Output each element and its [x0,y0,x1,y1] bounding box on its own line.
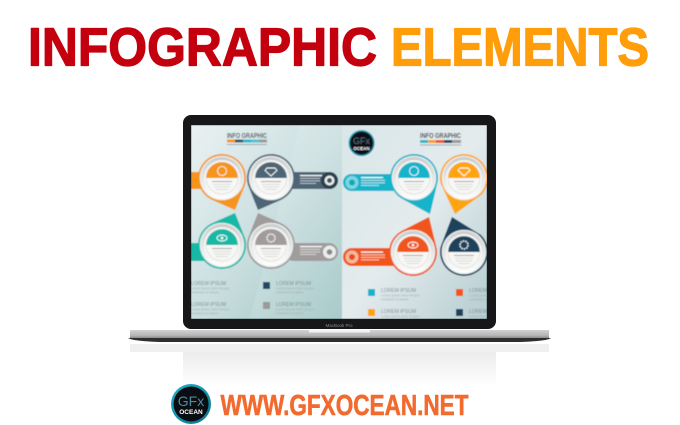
gray pin [247,213,295,269]
dark bar with text [285,172,338,189]
left legend: Lorem ipsum dolor tempor [276,308,315,312]
right legend: LOREM IPSUM [469,309,504,315]
right legend: LOREM IPSUM [381,309,416,315]
brand logo: GFx [178,393,204,409]
right heading [420,133,461,146]
title [28,18,649,78]
cyan pin [390,154,438,214]
right legend: Lorem ipsum dolor tempor [469,314,508,318]
right legend: LOREM IPSUM [469,288,504,294]
laptop reflection [130,344,549,386]
left legend: Lorem ipsum dolor tempor [191,286,230,290]
left legend: incididunt ut labore [191,290,219,294]
right legend: incididunt ut labore [381,298,409,302]
website url: WWW.GFXOCEAN.NET [220,390,469,422]
hinge notch [309,330,370,332]
left heading [227,133,267,145]
left infographic [191,133,338,316]
teal side bar [191,243,205,261]
right infographic [342,130,487,318]
left heading: INFO GRAPHIC [227,133,267,140]
left legend: incididunt ut labore [276,290,304,294]
screen logo: OCEAN [353,146,370,151]
left legend: LOREM IPSUM [191,281,226,287]
cyan bar with text [343,174,403,191]
laptop [128,115,551,342]
right legend: Lorem ipsum dolor tempor [381,294,420,298]
title word: infographic: INFOGRAPHIC [28,18,377,78]
screen logo: GFx [353,136,370,146]
left legend: incididunt ut labore [191,312,219,316]
right legend: Lorem ipsum dolor tempor [381,314,420,318]
title word: elements: ELEMENTS [391,18,649,78]
left legend [191,281,315,316]
brand logo: OCEAN [179,409,203,416]
right legend [367,288,487,318]
left legend: Lorem ipsum dolor tempor [276,286,315,290]
gray bar with text [285,243,338,261]
laptop screen [191,125,508,319]
laptop base [130,330,549,338]
orange pin [198,154,246,210]
right heading: INFO GRAPHIC [420,133,461,140]
laptop model label: MacBook Pro [325,323,353,328]
teal pin [198,213,246,269]
orange-red bar with text [343,248,403,266]
amber pin [440,154,488,214]
navy pin [440,217,488,276]
right legend: LOREM IPSUM [381,288,416,294]
left legend: LOREM IPSUM [191,302,226,308]
left legend: Lorem ipsum dolor tempor [191,308,230,312]
laptop bezel [183,115,496,329]
left legend: LOREM IPSUM [276,302,311,308]
left legend: LOREM IPSUM [276,281,311,287]
left legend: incididunt ut labore [276,312,304,316]
right legend: incididunt ut labore [469,298,497,302]
orange side bar [191,171,202,190]
dark slate pin [247,154,295,210]
right legend: Lorem ipsum dolor tempor [469,294,508,298]
orange-red pin [389,217,437,276]
base shadow [128,338,551,342]
brand logo [171,384,211,424]
screen logo [348,130,374,156]
